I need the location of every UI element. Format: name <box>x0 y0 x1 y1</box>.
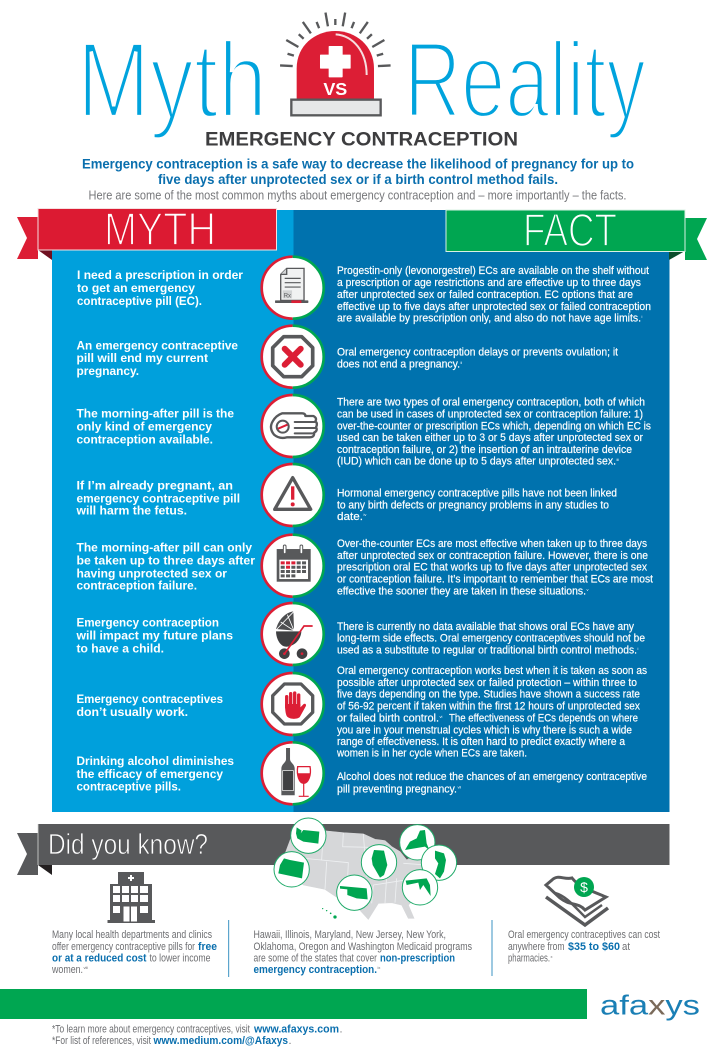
myth statements: to have a child. <box>76 641 164 655</box>
ribbon: Myth: MYTH <box>104 203 216 255</box>
text: Medicaid coverage: Oklahoma, Oregon and Washington Medicaid programs <box>254 941 472 953</box>
myth statements: to get an emergency <box>77 281 195 295</box>
myth statements: contraceptive pills. <box>76 780 181 794</box>
fact statements: v <box>586 587 588 592</box>
fact statements: a prescription or age restrictions and are effective up to three days <box>337 277 641 289</box>
state: Maryland <box>402 870 438 905</box>
banner: Did you know? <box>17 824 670 875</box>
icon: money with dollar: $ <box>580 879 588 895</box>
ribbon: Fact: FACT <box>523 204 617 256</box>
icon: prescription document <box>262 257 324 319</box>
banner: Did you know?: Did you know? <box>48 829 208 861</box>
fact statements: Over-the-counter ECs are most effective when taken up to three days <box>337 538 647 550</box>
text: cost: $35 to $60 <box>568 941 620 953</box>
fact statements: possible after unprotected sex or failed protection – within three to <box>337 677 637 689</box>
fact statements: effective the sooner they are taken in these situations. <box>337 585 586 597</box>
text: cost: x <box>550 954 552 959</box>
map: US states covering non-prescription EC <box>274 818 457 919</box>
fact statements: does not end a pregnancy. <box>337 359 460 371</box>
icon: baby stroller <box>262 603 324 665</box>
fact statements: women is in her cycle when ECs are taken. <box>336 748 527 760</box>
title: Myth vs Reality: Myth <box>77 19 267 140</box>
text: cost: anywhere from <box>508 941 564 953</box>
footnotes: www.afaxys.com <box>253 1024 339 1036</box>
heading: Emergency Contraception: EMERGENCY CONTRACEPTION <box>205 129 518 151</box>
fact statements: (IUD) which can be done up to 5 days after unprotected sex. <box>337 456 616 468</box>
fact statements: ii <box>460 360 462 365</box>
myth statements <box>76 268 255 794</box>
ribbon: Myth <box>17 203 276 260</box>
text: free or reduced cost: free <box>198 941 217 953</box>
myth statements: contraceptive pill (EC). <box>77 294 202 308</box>
text: Medicaid coverage: emergency contraception. <box>254 964 377 976</box>
myth statements: pill will end my current <box>76 351 208 365</box>
icon: siren with VS <box>280 13 391 115</box>
text: cost <box>508 929 660 964</box>
myth statements: Drinking alcohol diminishes <box>76 754 234 768</box>
fact statements: vii <box>458 784 461 790</box>
fact statements: The effectiveness of ECs depends on where <box>449 712 638 724</box>
fact statements: Hormonal emergency contraceptive pills have not been linked <box>337 487 617 499</box>
fact statements: i <box>638 646 639 651</box>
icon: wine bottle and glass <box>262 742 324 804</box>
state: New York <box>400 825 435 860</box>
myth statements: emergency contraceptive pill <box>76 491 240 505</box>
icon: hand holding pill <box>262 395 324 457</box>
state: New Jersey <box>421 845 457 880</box>
text: cost: Oral emergency contraceptives can cost <box>508 929 660 941</box>
logo: afaxys: afa xys <box>600 990 700 1020</box>
fact statements: Oral emergency contraception delays or prevents ovulation; it <box>337 347 618 359</box>
icon: money with dollar <box>546 877 608 925</box>
text: free or reduced cost: offer emergency contraceptive pills for <box>52 941 195 953</box>
text: Medicaid coverage: Hawaii, Illinois, Maryland, New Jersey, New York, <box>254 929 446 941</box>
myth statements: only kind of emergency <box>76 419 212 433</box>
myth statements: I need a prescription in order <box>77 268 243 282</box>
fact statements: range of effectiveness. It is often hard to predict exactly where a <box>337 736 625 748</box>
fact statements: can be used in cases of unprotected sex or contraception failure: 1) <box>337 408 643 420</box>
fact statements: used as a substitute to regular or traditional birth control methods. <box>337 645 637 657</box>
state: Oregon <box>274 852 309 887</box>
state: Illinois <box>361 845 397 880</box>
fact statements: over-the-counter or prescription ECs which, depending on which EC is <box>337 420 651 432</box>
myth statements: Emergency contraception <box>76 616 219 630</box>
footnotes: . <box>288 1035 292 1047</box>
myth statements: be taken up to three days after <box>76 553 255 567</box>
icon: stop hand <box>262 673 324 735</box>
fact statements: long-term side effects. Oral emergency contraceptives should not be <box>337 633 645 645</box>
fact statements: iii <box>616 457 619 462</box>
text: free or reduced cost: or at a reduced cost <box>52 952 147 964</box>
title: Myth vs Reality <box>77 19 646 140</box>
myth statements: If I’m already pregnant, an <box>76 478 233 492</box>
panel: myth column background <box>52 210 294 812</box>
map outline <box>283 831 437 919</box>
text: cost: at <box>622 941 630 953</box>
myth statements: the efficacy of emergency <box>76 767 223 781</box>
fact statements: or contraception failure. It’s important to remember that ECs are most <box>337 574 653 586</box>
icon: calendar <box>262 535 324 597</box>
fact statements: after unprotected sex or contraception failure. However, there is one <box>337 550 648 562</box>
intro text: five days after unprotected sex or if a birth control method fails. <box>158 172 558 187</box>
myth statements: having unprotected sex or <box>76 566 227 580</box>
icon: warning triangle <box>262 464 324 526</box>
panel: fact column background <box>294 210 670 812</box>
intro text: Here are some of the most common myths about emergency contraception and – more importantly – the facts. <box>88 188 626 202</box>
icon: hospital building <box>108 872 155 923</box>
fact statements: five days depending on the type. Studies have shown a success rate <box>337 689 640 701</box>
icon: prescription document: Rx <box>284 294 291 300</box>
footer bar <box>0 989 587 1019</box>
state: Oklahoma <box>337 875 372 910</box>
myth statements: will harm the fetus. <box>76 503 187 517</box>
fact statements: or failed birth control. <box>337 712 439 724</box>
myth statements: An emergency contraceptive <box>76 338 238 352</box>
text: Medicaid coverage <box>254 929 472 976</box>
footnotes: . <box>340 1024 342 1036</box>
fact statements: effective up to five days after unprotected sex or failed contraception <box>337 301 651 313</box>
fact statements: Oral emergency contraception works best when it is taken as soon as <box>337 665 647 677</box>
myth statements: The morning-after pill is the <box>76 407 234 421</box>
text: Medicaid coverage: are some of the states that cover <box>254 952 377 964</box>
fact statements: after unprotected sex or failed contraception. EC options that are <box>337 289 633 301</box>
divider <box>491 920 493 976</box>
footnotes <box>52 1024 342 1047</box>
fact statements: date. <box>337 511 363 523</box>
divider <box>228 920 230 977</box>
fact statements: Progestin-only (levonorgestrel) ECs are available on the shelf without <box>337 265 649 277</box>
fact statements: There are two types of oral emergency contraception, both of which <box>337 397 645 409</box>
text: free or reduced cost: Many local health departments and clinics <box>52 929 212 941</box>
fact statements: iv <box>364 512 366 517</box>
fact statements: pill preventing pregnancy. <box>337 783 457 795</box>
fact statements <box>336 265 653 795</box>
footnotes: *For list of references, visit <box>52 1035 151 1047</box>
state: Washington <box>291 818 326 853</box>
text: Medicaid coverage: ix <box>378 965 380 970</box>
text: free or reduced cost: viii <box>84 965 88 970</box>
fact statements: vi <box>440 714 442 719</box>
myth statements: Emergency contraceptives <box>76 692 223 706</box>
myth statements: will impact my future plans <box>76 629 233 643</box>
text: free or reduced cost: women. <box>51 964 83 976</box>
text: free or reduced cost <box>51 929 217 976</box>
fact statements: are available by prescription only, and also do not have age limits. <box>337 313 641 325</box>
fact statements: i <box>642 314 643 319</box>
footnotes: www.medium.com/@Afaxys <box>153 1035 288 1047</box>
myth statements: The morning-after pill can only <box>76 541 252 555</box>
myth statements: contraception failure. <box>76 579 197 593</box>
footnotes: *To learn more about emergency contraceptives, visit <box>52 1024 250 1036</box>
icon: siren with VS: VS <box>323 79 347 99</box>
text: cost: pharmacies. <box>508 952 550 964</box>
myth statements: contraception available. <box>76 432 213 446</box>
intro text <box>82 156 634 202</box>
ribbon: Fact <box>446 204 707 260</box>
myth statements: don’t usually work. <box>76 705 188 719</box>
fact statements: used can be taken either up to 3 or 5 days after unprotected sex or <box>337 432 643 444</box>
fact statements: contraception failure, or 2) the insertion of an intrauterine device <box>337 444 632 456</box>
fact statements: prescription oral EC that works up to five days after unprotected sex <box>337 562 648 574</box>
text: Medicaid coverage: non-prescription <box>380 952 455 964</box>
fact statements: you are in your menstrual cycles which is why there is such a wide <box>337 724 632 736</box>
fact statements: There is currently no data available that shows oral ECs have any <box>337 621 635 633</box>
fact statements: of 56-92 percent if taken within the first 12 hours of unprotected sex <box>337 701 641 713</box>
text: free or reduced cost: to lower income <box>150 952 210 964</box>
icon: stop sign with X <box>262 326 324 388</box>
fact statements: to any birth defects or pregnancy problems in any studies to <box>337 499 609 511</box>
myth statements: pregnancy. <box>76 364 139 378</box>
intro text: Emergency contraception is a safe way to decrease the likelihood of pregnancy for up to <box>82 156 634 172</box>
fact statements: Alcohol does not reduce the chances of an emergency contraceptive <box>337 771 647 783</box>
